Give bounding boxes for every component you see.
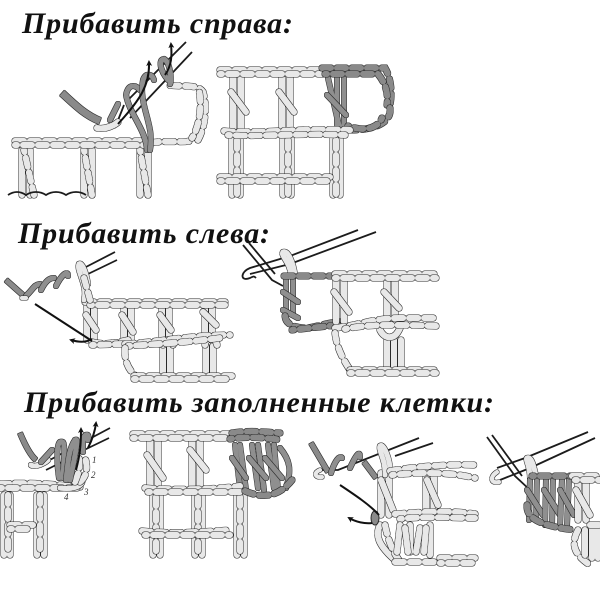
arrow: pointing to stitch bbox=[340, 485, 379, 515]
stitch loop with numbers bbox=[60, 455, 87, 488]
top chain bbox=[572, 476, 600, 480]
loop on needle bbox=[79, 264, 90, 300]
arrow: curved return bbox=[71, 339, 92, 342]
top chain bbox=[85, 302, 225, 305]
hook tip bbox=[316, 470, 322, 477]
top chain bbox=[0, 483, 80, 488]
arrow: left up bbox=[76, 429, 81, 470]
top chain white bbox=[220, 70, 325, 74]
loop bbox=[31, 460, 48, 466]
middle chain bbox=[335, 318, 436, 329]
left edge chain bbox=[125, 348, 137, 377]
title: add on the right: Прибавить справа: bbox=[21, 7, 293, 40]
grey stitch bbox=[371, 511, 379, 525]
bottom chain bbox=[134, 376, 232, 379]
corner grey chain bbox=[285, 316, 340, 330]
top chain bbox=[390, 465, 475, 478]
grey corner chain bbox=[527, 476, 575, 530]
panel: add right, step one bbox=[8, 42, 205, 195]
panel: add left, finished bbox=[242, 230, 436, 373]
third chain bbox=[142, 530, 230, 535]
title: add on the left: Прибавить слева: bbox=[17, 217, 270, 250]
step numbers: 4 bbox=[64, 492, 69, 502]
middle chain bbox=[395, 512, 475, 519]
yarn strand bbox=[243, 243, 283, 286]
lower posts bbox=[153, 495, 244, 555]
grey filled block bbox=[527, 480, 574, 525]
loop bbox=[527, 458, 536, 478]
loop bbox=[282, 252, 295, 275]
posts bbox=[86, 305, 216, 340]
step numbers: 3 bbox=[83, 487, 89, 497]
needle bbox=[46, 428, 110, 470]
hook end bbox=[242, 256, 290, 279]
needle bbox=[84, 252, 117, 274]
twisted yarn on needle bbox=[22, 273, 68, 298]
grey post bbox=[327, 78, 346, 130]
top chain bbox=[15, 141, 190, 145]
lower posts bbox=[232, 137, 340, 195]
step numbers: 2 bbox=[91, 470, 96, 480]
panel: filled cells, step one bbox=[0, 423, 110, 555]
needle bbox=[115, 42, 192, 128]
bottom chain bbox=[350, 370, 436, 373]
posts bbox=[381, 470, 438, 515]
yarn bbox=[311, 443, 328, 472]
bottom chain bbox=[440, 558, 475, 563]
step numbers bbox=[64, 455, 96, 502]
lower posts bbox=[163, 339, 217, 376]
yarn bbox=[20, 433, 36, 460]
posts bbox=[334, 280, 399, 322]
middle chain bbox=[10, 525, 33, 529]
strand bbox=[487, 435, 530, 490]
posts grey bbox=[283, 278, 298, 318]
needle bbox=[318, 438, 433, 470]
left edge bbox=[335, 333, 350, 370]
white posts bbox=[576, 480, 590, 520]
title: add filled cells: Прибавить заполненные клетки: bbox=[23, 386, 494, 419]
middle chain bbox=[92, 335, 230, 346]
grey filled block bbox=[232, 445, 289, 490]
lower chain bbox=[220, 177, 330, 181]
lower filled stitches bbox=[574, 525, 600, 565]
top chain bbox=[133, 431, 282, 440]
lower posts bbox=[22, 150, 148, 195]
lower posts bbox=[380, 328, 401, 370]
panel: filled cells, finished bbox=[133, 431, 292, 555]
arrow: pointing to hook bbox=[35, 304, 92, 341]
top chain bbox=[284, 274, 436, 278]
grey strands bbox=[41, 435, 88, 480]
panel: add left, step one bbox=[6, 252, 232, 379]
working loops and yarn bbox=[62, 59, 171, 150]
yarn bbox=[6, 280, 24, 296]
panel: filled left, finished bbox=[487, 432, 600, 565]
needle loop bbox=[380, 446, 390, 475]
twist on needle bbox=[331, 454, 376, 478]
hook tip bbox=[492, 472, 499, 482]
panel: add right, finished bbox=[220, 68, 391, 195]
posts bbox=[147, 440, 206, 488]
posts top row bbox=[231, 78, 294, 130]
turning chain loop bbox=[165, 85, 205, 140]
filled stitches bbox=[378, 525, 440, 562]
arrow: right up bbox=[88, 423, 96, 448]
middle chain bbox=[145, 480, 292, 495]
top chain grey and loop bbox=[322, 68, 391, 130]
middle chain bbox=[224, 130, 350, 136]
panel: filled left, step one bbox=[311, 438, 475, 563]
bottom chain bbox=[8, 192, 86, 195]
posts bbox=[4, 495, 44, 555]
arrow: up bbox=[118, 62, 149, 124]
needle bbox=[250, 230, 376, 274]
arrow: thread tip bbox=[165, 44, 171, 75]
arrow: curved bbox=[349, 518, 372, 523]
needle bbox=[497, 432, 595, 480]
step numbers: 1 bbox=[92, 455, 96, 465]
